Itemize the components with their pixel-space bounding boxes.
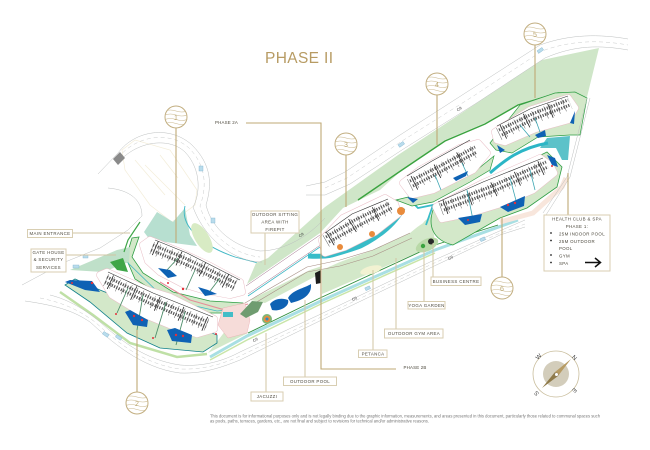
label: yoga garden — [408, 302, 445, 309]
landscape: north green belt — [247, 48, 599, 284]
collector road — [247, 235, 325, 291]
yoga garden dot — [421, 244, 425, 248]
disclaimer — [210, 414, 601, 424]
landscape: outer green stripe — [210, 253, 435, 360]
river under cluster 3 — [308, 208, 403, 256]
label: gate house: SERVICES — [36, 265, 61, 270]
lot outlines — [122, 140, 197, 222]
panel: health club and spa: PHASE 1: — [566, 224, 588, 229]
marker 5: 5 — [533, 32, 537, 39]
business centre dot — [428, 238, 434, 244]
landscape: central park — [322, 215, 435, 294]
road labels — [252, 105, 463, 343]
building cluster 6 — [436, 158, 554, 219]
yoga garden patch — [414, 234, 440, 256]
label: jacuzzi: JACUZZI — [257, 394, 277, 399]
pond — [540, 136, 570, 160]
landscape: park wedge — [250, 266, 322, 303]
label: gate house — [31, 249, 66, 272]
building connector teal lines — [435, 118, 540, 220]
label: outdoor sitting area — [251, 211, 299, 233]
road: west spur — [22, 188, 142, 285]
label: outdoor gym area: OUTDOOR GYM AREA — [388, 331, 440, 336]
landscape: teal loop — [184, 206, 258, 263]
label: outdoor pool: OUTDOOR POOL — [290, 379, 330, 384]
marker 4: 4 — [435, 82, 439, 89]
river white edge — [306, 205, 433, 265]
north hedge — [358, 93, 578, 200]
landscape: pale lawn — [187, 220, 217, 256]
label: main entrance — [28, 230, 72, 238]
red accents — [71, 165, 553, 339]
central amenities: jacuzzi — [262, 314, 272, 324]
landscape: west park — [208, 328, 248, 353]
panel: health club and spa: GYM — [559, 254, 570, 258]
landscape: teal path — [127, 262, 247, 311]
callout lines — [66, 45, 568, 392]
gate block — [113, 152, 125, 165]
marker 6: 6 — [500, 286, 504, 293]
label: outdoor gym area — [384, 329, 443, 338]
building cluster 3 — [322, 198, 398, 253]
river between 5 and 6 — [490, 143, 548, 173]
road labels: C9 — [252, 336, 259, 343]
label: gate house: & SECURITY — [34, 257, 63, 262]
marker 2: 2 — [135, 401, 139, 408]
phase divider line — [246, 123, 396, 369]
central amenities: planting — [240, 301, 263, 318]
pools — [65, 111, 575, 343]
road: south avenue — [25, 227, 525, 373]
landscape: south-west garden — [65, 279, 217, 352]
roads — [22, 36, 628, 373]
landscape: south-west stripe — [60, 292, 207, 357]
landscape: pink path — [160, 282, 248, 310]
park path lines — [245, 233, 412, 306]
marker 1 — [165, 106, 187, 128]
panel: health club and spa: 25M INDOOR POOL — [559, 232, 605, 236]
label: jacuzzi — [251, 392, 283, 401]
label: business centre: BUSINESS CENTRE — [433, 279, 479, 284]
panel: health club and spa: POOL — [559, 246, 573, 251]
compass: S — [534, 389, 541, 396]
entrance stripe — [124, 222, 140, 252]
road labels: C9 — [298, 231, 305, 238]
central amenities: teal deck — [223, 312, 233, 317]
building connector lines — [117, 258, 220, 345]
landscape: entrance greens — [70, 247, 130, 272]
road labels: C9 — [456, 105, 463, 112]
road markers — [73, 47, 544, 340]
central amenities: dark deck — [315, 270, 321, 284]
label: gate house: GATE HOUSE — [33, 250, 64, 255]
phase 2B label: PHASE 2B — [403, 365, 427, 370]
marker 3 — [335, 133, 357, 155]
disclaimer: This document is for informational purposes only and is not legally binding due to the graphic information, measurements, and areas presented in this document, particularly those related to communal spaces such — [210, 414, 601, 418]
building cluster 5 — [495, 96, 575, 142]
label: yoga garden: YOGA GARDEN — [408, 303, 445, 308]
label: outdoor sitting area: FIREPIT — [265, 227, 285, 232]
panel: health club and spa — [544, 215, 610, 271]
road: right edge — [543, 98, 590, 215]
label: outdoor pool — [284, 377, 336, 386]
orange terraces — [337, 207, 405, 250]
petanca patch — [359, 263, 383, 277]
marker 6 — [491, 277, 513, 299]
panel: health club and spa: 25M OUTDOOR — [559, 239, 595, 244]
panel: health club and spa: HEALTH CLUB & SPA — [552, 216, 602, 222]
panel: health club and spa: SPA — [559, 261, 569, 266]
compass: W — [535, 353, 544, 361]
disclaimer: as pools, paths, terraces, gardens, etc., are not final and subject to revisions for technical and/or administrative reasons. — [210, 418, 429, 424]
title: PHASE II — [265, 50, 333, 67]
compass: E — [570, 386, 577, 393]
building cluster 4 — [403, 140, 487, 195]
road teal edge — [248, 247, 320, 296]
label: petanca — [358, 350, 387, 358]
road: north avenue — [306, 36, 628, 186]
building cluster 2 — [100, 272, 214, 334]
compass — [533, 351, 579, 397]
central amenities: pink pad — [218, 303, 250, 338]
central river — [408, 198, 433, 225]
landscape: middle garden — [126, 237, 247, 313]
collector road edges — [246, 235, 322, 294]
landscape: south-east garden — [431, 152, 562, 245]
label: outdoor sitting area: AREA WITH — [261, 220, 289, 224]
site plan — [22, 36, 628, 373]
label: main entrance: MAIN ENTRANCE — [30, 231, 70, 236]
label: outdoor sitting area: OUTDOOR SITTING — [252, 212, 298, 217]
landscape: boundary hedge — [248, 225, 498, 333]
marker 3: 3 — [344, 142, 348, 149]
marker 1: 1 — [174, 115, 178, 122]
marker 2 — [126, 392, 148, 414]
landscape: north-east garden — [490, 92, 587, 153]
label: petanca: PETANCA — [362, 352, 384, 356]
road: entry loop — [98, 133, 325, 251]
marker 5 — [524, 23, 546, 45]
label: business centre — [431, 277, 481, 286]
road labels: C9 — [447, 254, 454, 261]
fringe — [500, 178, 566, 222]
arrow — [585, 258, 600, 267]
building cluster 1 — [143, 240, 242, 295]
marker 4 — [426, 73, 448, 95]
phase 2A label: PHASE 2A — [215, 120, 238, 125]
road labels: C9 — [351, 295, 358, 302]
landscape: dark green lawn — [110, 258, 128, 272]
compass: N — [570, 355, 577, 362]
landscape: entrance mint area — [144, 208, 197, 246]
landscape: canal strip — [210, 220, 518, 357]
landscape: garden between 4 and 6 — [396, 156, 494, 206]
